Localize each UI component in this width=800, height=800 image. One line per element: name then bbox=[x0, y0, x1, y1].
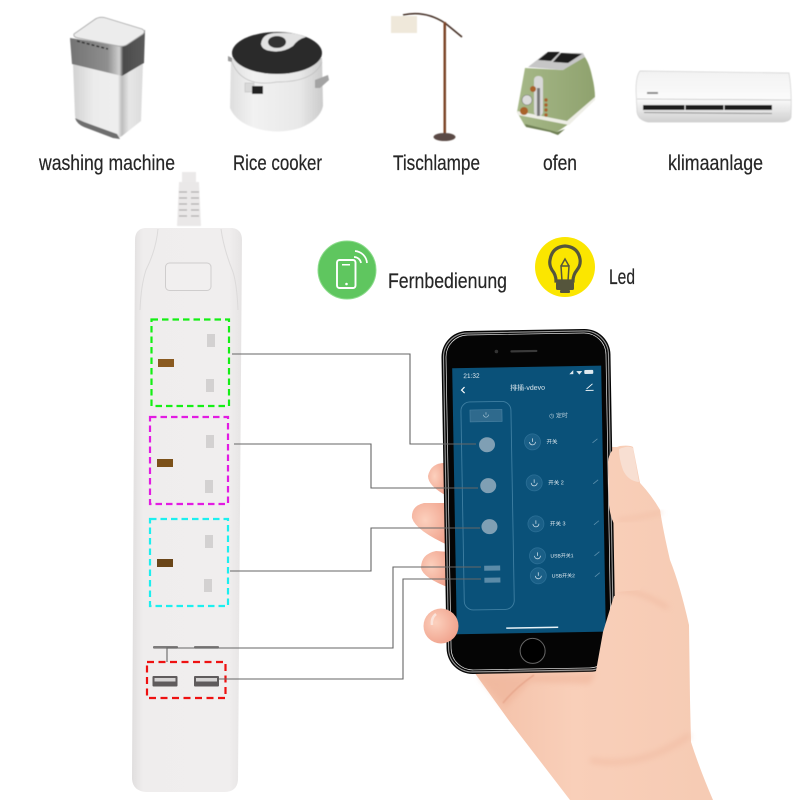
status bar bbox=[463, 370, 593, 380]
switch list: 开关 2 bbox=[548, 478, 564, 487]
socket 3 outlined in cyan bbox=[150, 519, 228, 606]
timer label: ◷ 定时 bbox=[549, 411, 568, 420]
connector: USB indicator to app bbox=[167, 567, 481, 662]
strip outline in app bbox=[461, 401, 514, 610]
USB tiles bbox=[484, 565, 500, 583]
palm crease bbox=[503, 675, 534, 703]
icon: air conditioner bbox=[636, 71, 791, 122]
icon: floor lamp bbox=[391, 14, 462, 141]
switch list: USB开关2 bbox=[552, 572, 575, 580]
text: Tischlampe: Tischlampe bbox=[393, 152, 480, 175]
screen title: 排插-vdevo bbox=[510, 383, 545, 392]
status bar: 21:32 bbox=[463, 373, 480, 380]
fingers behind the phone bbox=[412, 463, 450, 588]
connector: USB ports to app bbox=[219, 579, 481, 679]
palm overlapping phone edge bbox=[478, 590, 690, 762]
app screen bbox=[452, 366, 606, 634]
connector: socket 3 to app bbox=[230, 528, 480, 571]
text: Led: Led bbox=[609, 266, 635, 289]
icon: yellow light bulb bbox=[535, 237, 595, 297]
power switch bbox=[166, 263, 211, 290]
USB indicator bars bbox=[153, 646, 219, 649]
socket 2 outlined in magenta bbox=[150, 417, 228, 504]
text: ofen: ofen bbox=[543, 152, 577, 175]
text: rice cooker: Rice cooker bbox=[233, 152, 322, 175]
earpiece and camera bbox=[495, 349, 537, 353]
text: washing machine: washing machine bbox=[38, 152, 175, 175]
switch list: 开关 bbox=[546, 437, 558, 446]
power strip bbox=[132, 172, 242, 792]
little finger over phone edge bbox=[424, 608, 458, 644]
switch list: USB开关1 bbox=[550, 552, 574, 560]
edit icon bbox=[585, 384, 594, 390]
hand holding phone bbox=[412, 447, 713, 800]
back of hand and wrist bbox=[474, 447, 713, 800]
strip body bbox=[132, 228, 242, 792]
connector: socket 1 to app bbox=[232, 354, 476, 444]
USB ports outlined in red bbox=[147, 662, 226, 698]
socket buttons bbox=[479, 437, 498, 534]
connector: socket 2 to app bbox=[234, 444, 478, 488]
socket 1 outlined in green bbox=[152, 320, 229, 406]
icon: washing machine bbox=[70, 17, 145, 139]
thumb base crease bbox=[618, 590, 668, 608]
thumb nail bbox=[619, 447, 639, 482]
switch list bbox=[524, 433, 600, 584]
back arrow bbox=[462, 387, 465, 393]
icon: rice cooker bbox=[228, 32, 329, 132]
wrist crease bbox=[590, 735, 690, 762]
home indicator bbox=[506, 626, 558, 629]
master power tile bbox=[470, 409, 502, 422]
thumb knuckle bbox=[618, 512, 662, 520]
smartphone bbox=[441, 329, 616, 674]
home button bbox=[520, 638, 545, 664]
phone body bbox=[441, 329, 616, 674]
power cord bbox=[177, 172, 201, 226]
shadow under the phone bbox=[478, 673, 596, 708]
text: Fernbedienung: Fernbedienung bbox=[388, 270, 507, 293]
switch list: 开关 3 bbox=[550, 519, 566, 528]
text: klimaanlage: klimaanlage bbox=[668, 152, 763, 175]
icon: toaster bbox=[517, 52, 595, 135]
thumb bbox=[608, 446, 664, 592]
icon: remote control phone in green circle bbox=[318, 241, 376, 299]
